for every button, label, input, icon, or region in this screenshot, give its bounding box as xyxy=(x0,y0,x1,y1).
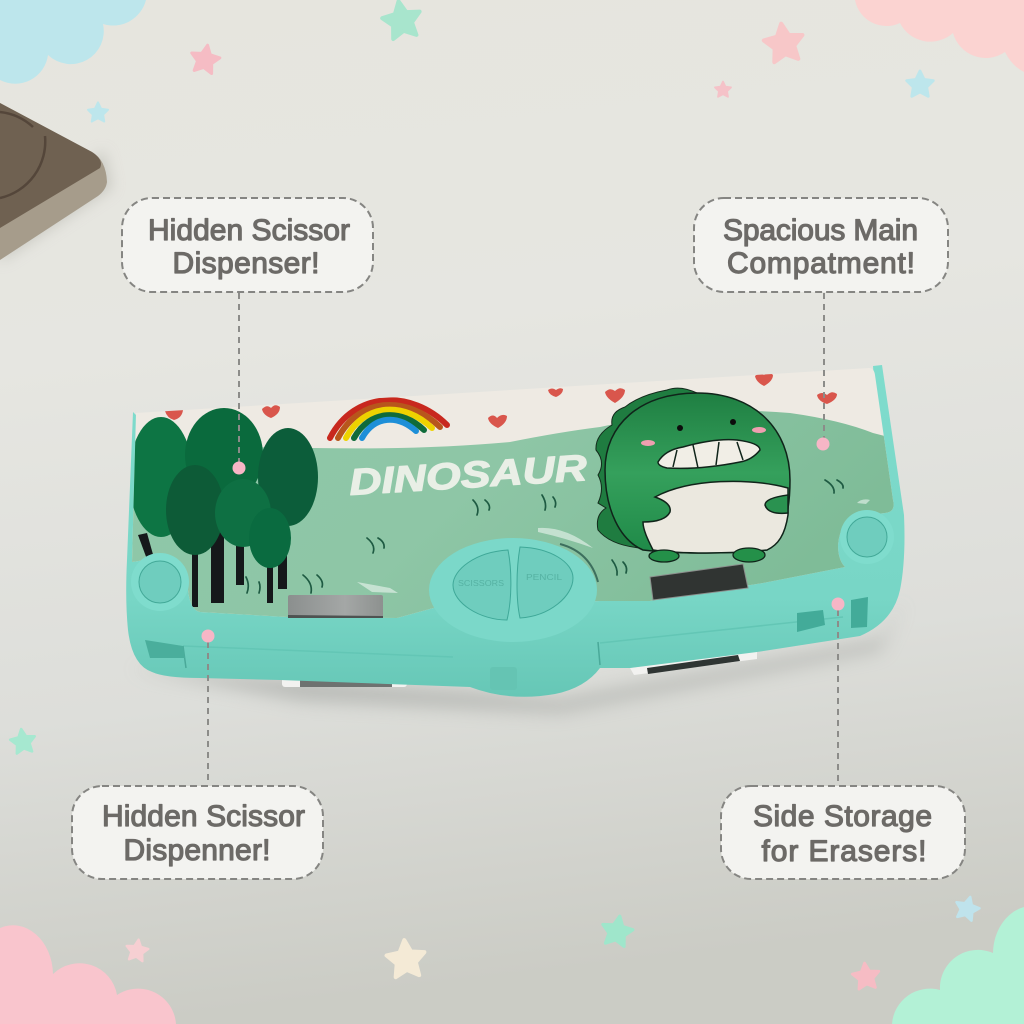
lid title: DINOSAUR xyxy=(348,447,588,503)
pencil label: PENCIL xyxy=(526,573,563,582)
dark metal clip xyxy=(650,564,748,600)
callout: side storage for erasers (bottom right): for Erasers! xyxy=(762,835,926,868)
cloud: top left xyxy=(0,0,146,84)
green meadow xyxy=(120,411,900,630)
callout: hidden scissor dispenser (top left) xyxy=(122,198,373,292)
top metal clip xyxy=(288,595,383,618)
object: coaster xyxy=(0,103,112,262)
callout: hidden scissor dispenner (bottom left): Dispenner! xyxy=(124,834,270,867)
pencil button xyxy=(517,547,573,618)
tree trunks xyxy=(138,530,287,607)
button dark recess xyxy=(560,544,598,582)
callout: spacious main compartment (top right): Spacious Main xyxy=(723,214,918,247)
dinosaur eyes xyxy=(677,419,736,431)
dinosaur cheeks xyxy=(641,427,766,446)
product shadow xyxy=(130,600,905,712)
callout: hidden scissor dispenser (top left): Hidden Scissor xyxy=(148,214,350,247)
button base xyxy=(429,538,597,642)
callout: hidden scissor dispenser (top left): Dispenser! xyxy=(172,247,320,280)
shell seams and notches xyxy=(145,617,843,690)
dinosaur mouth xyxy=(658,440,760,468)
left round button xyxy=(131,553,189,611)
cloud: bottom left xyxy=(0,925,176,1024)
leader line: bottom right xyxy=(832,598,844,785)
callout: hidden scissor dispenner (bottom left): Hidden Scissor xyxy=(102,800,305,833)
callout: side storage for erasers (bottom right) xyxy=(721,786,965,879)
dinosaur feet xyxy=(649,548,765,562)
dinosaur back scales xyxy=(596,388,697,548)
right round button xyxy=(840,510,894,564)
scissor label: SCISSORS xyxy=(458,579,504,588)
leader line: top right xyxy=(816,293,830,450)
lid artwork group xyxy=(120,373,900,630)
hearts xyxy=(165,373,837,428)
box shell xyxy=(126,365,904,697)
dinosaur body xyxy=(605,393,790,553)
dinosaur teeth xyxy=(673,442,743,468)
dinosaur right arm xyxy=(765,495,788,513)
lid artwork: cream sky xyxy=(132,368,894,618)
grass ticks xyxy=(246,480,843,593)
scissor button xyxy=(453,550,511,620)
dinosaur belly xyxy=(643,481,788,553)
callout: hidden scissor dispenner (bottom left) xyxy=(72,786,323,879)
glossy highlights xyxy=(357,499,870,593)
callout: spacious main compartment (top right) xyxy=(694,198,948,292)
bottom metal clips xyxy=(282,650,757,687)
center button xyxy=(429,538,598,642)
cloud: top right xyxy=(855,0,1024,72)
product: dinosaur pencil box xyxy=(120,365,905,712)
side slots xyxy=(797,597,868,632)
rainbow xyxy=(330,400,447,438)
leader line: top left xyxy=(232,293,246,474)
tree canopies xyxy=(129,408,318,568)
cloud: bottom right xyxy=(892,907,1024,1024)
dinosaur character xyxy=(596,388,790,562)
callout: spacious main compartment (top right): Compatment! xyxy=(727,247,915,280)
leader line: bottom left xyxy=(202,630,214,785)
callout: side storage for erasers (bottom right): Side Storage xyxy=(753,800,932,833)
